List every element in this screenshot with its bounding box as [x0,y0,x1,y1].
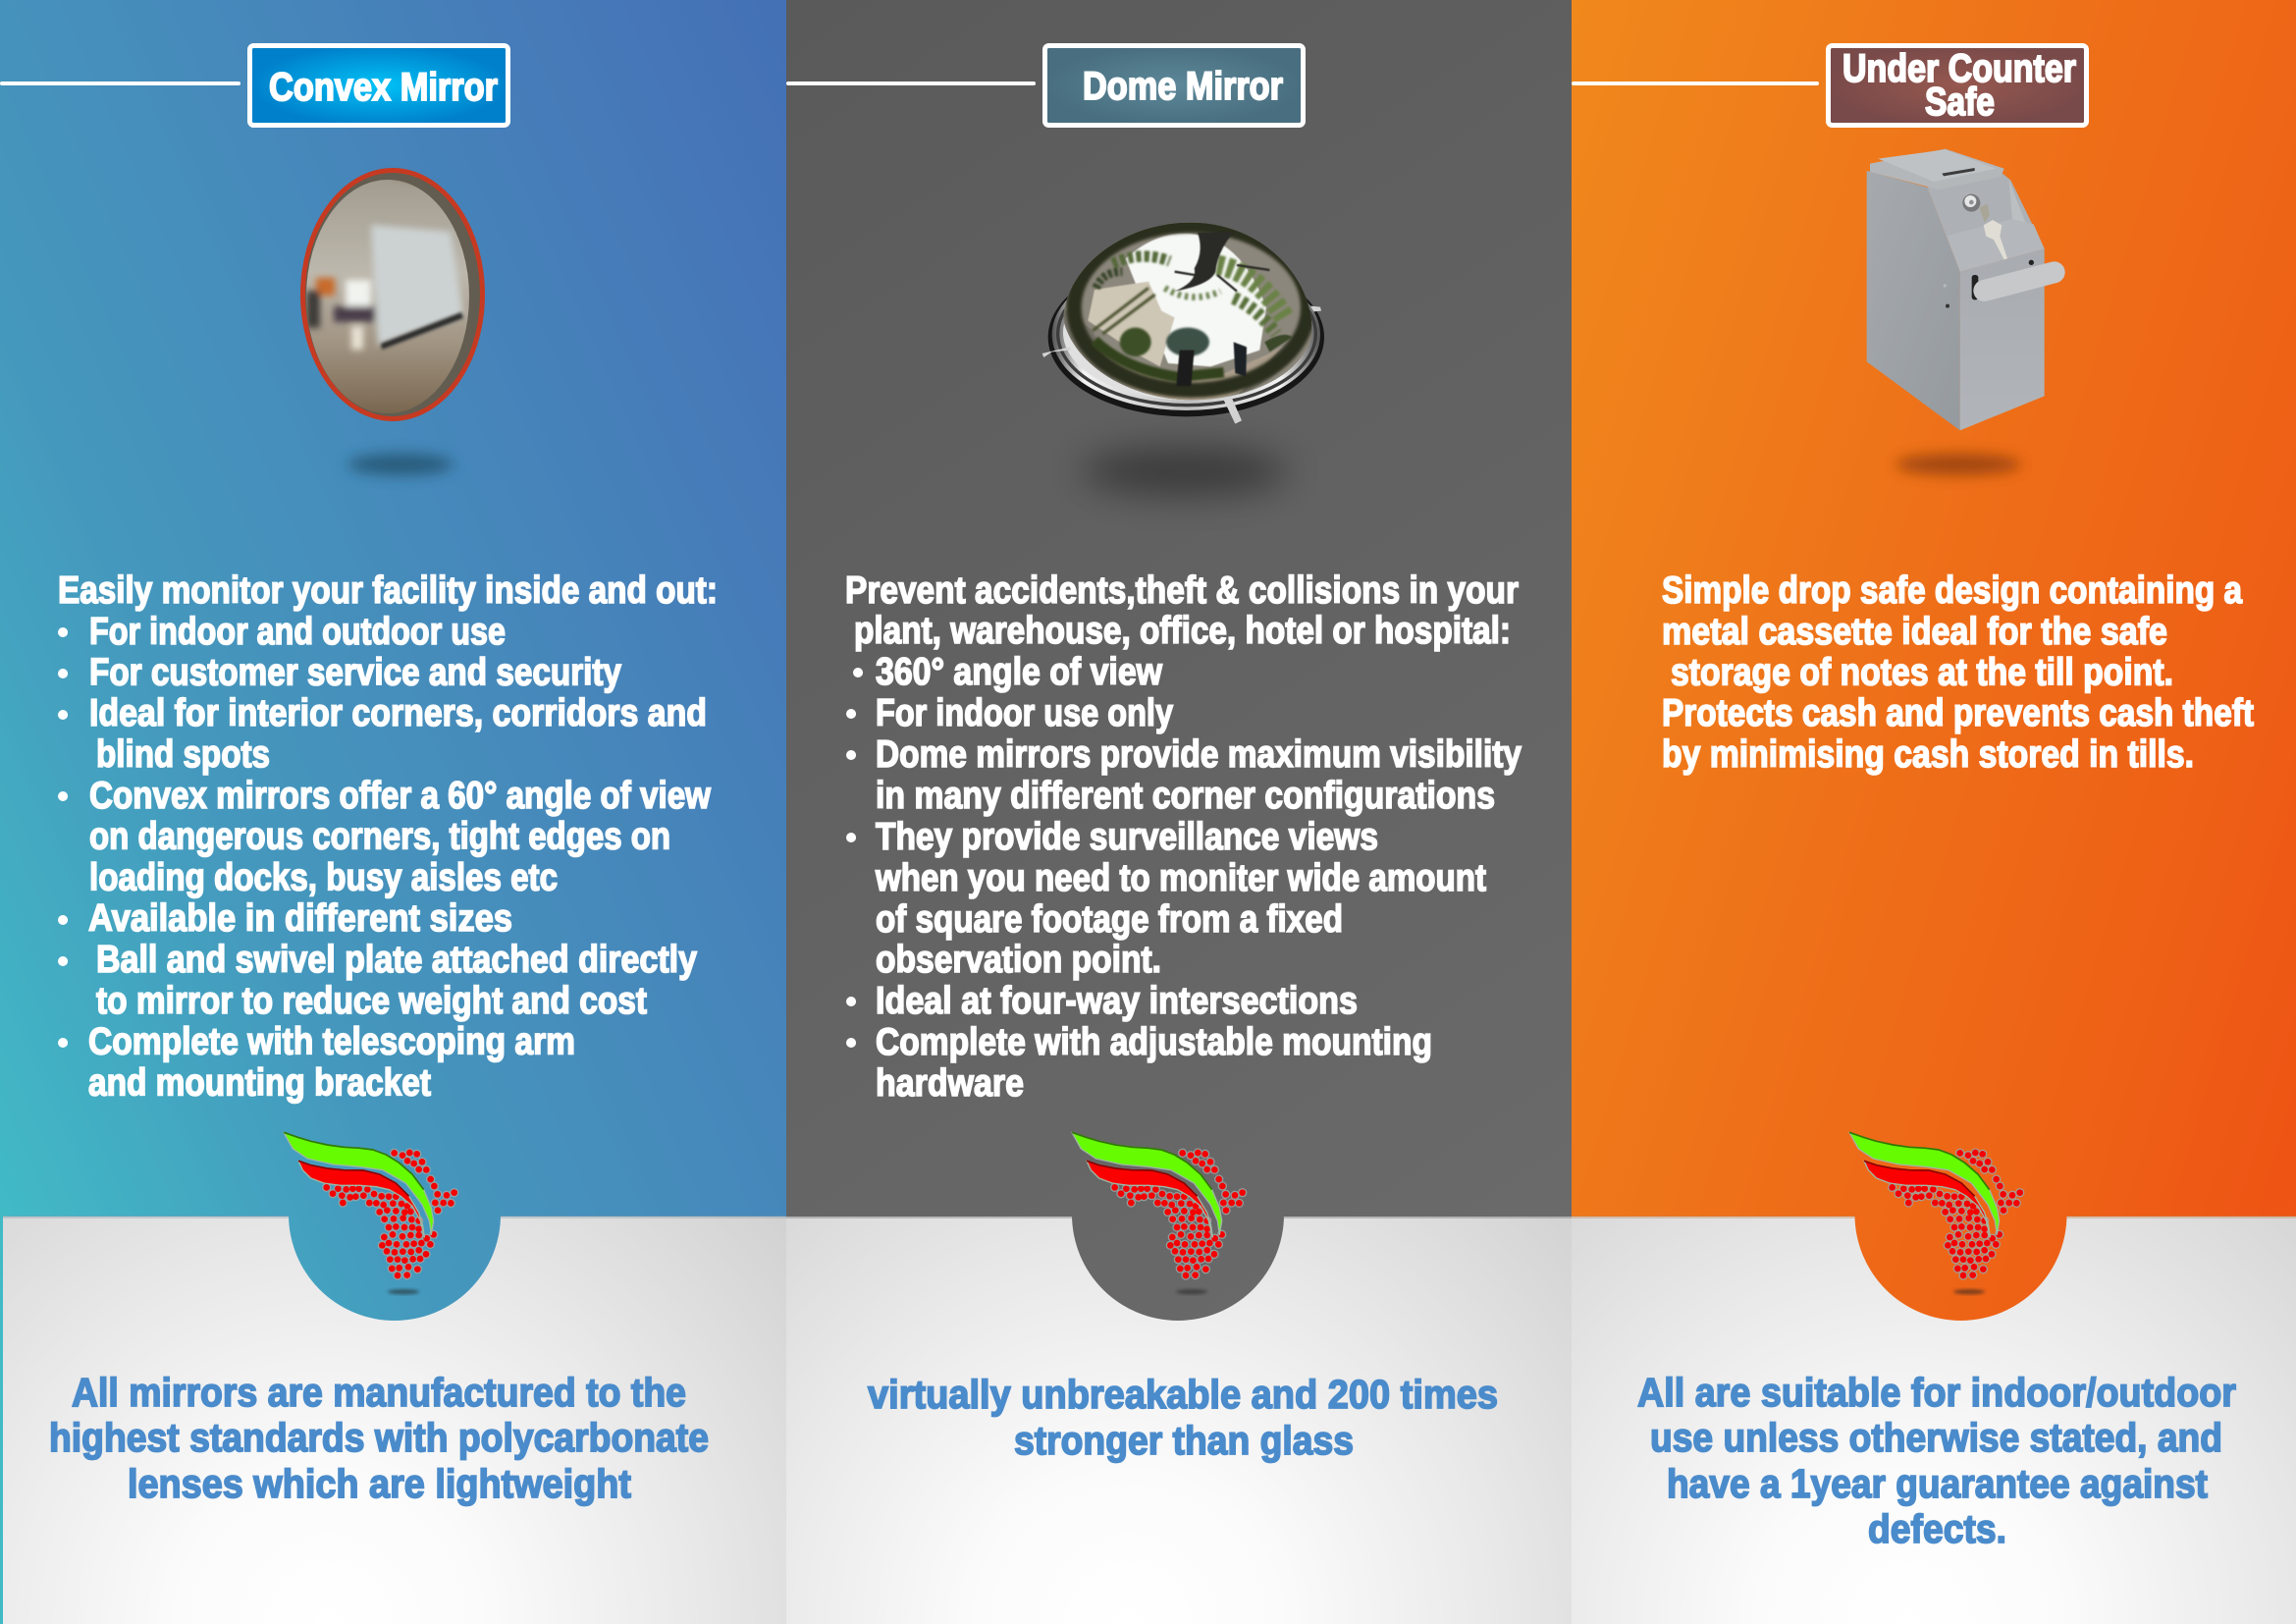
text block: convex mirror features: on dangerous corners, tight edges on [89,815,670,858]
text block: convex mirror features: Ideal for interior corners, corridors and [89,692,707,734]
text block: dome mirror features: Dome mirrors provide maximum visibility [876,733,1522,776]
text block: dome mirror features: hardware [876,1062,1024,1105]
heading connector line [1572,81,1819,85]
text block: safe description: storage of notes at the till point. [1671,652,2173,693]
shadow under convex mirror [347,454,454,475]
text block: convex mirror features: Available in different sizes [88,897,512,940]
text block: dome mirror features: Prevent accidents,theft & collisions in your [845,569,1519,612]
text block: dome mirror features: in many different corner configurations [876,775,1495,817]
panel: dome mirror [786,0,1572,1624]
lower panel background [786,1217,1572,1624]
text block: convex mirror features: Complete with telescoping arm [88,1021,575,1062]
icon: logo [1072,1132,1243,1294]
text block: dome mirror features: of square footage from a fixed [876,898,1343,941]
heading: Under Counter Safe: Under Counter [1842,47,2076,90]
text block: convex mirror features: Ball and swivel plate attached directly [96,939,697,981]
text block: convex mirror features: and mounting bracket [88,1062,431,1104]
text block: mirror standards [49,1370,709,1506]
text block: convex mirror features [58,569,718,1104]
text block: safe description: metal cassette ideal for the safe [1662,611,2167,653]
shadow under safe [1896,454,2021,475]
semicircle tab [1072,1109,1284,1321]
text block: convex mirror features: to mirror to reduce weight and cost [96,980,647,1022]
text block: convex mirror features: loading docks, busy aisles etc [89,856,558,899]
text block: dome mirror features: Complete with adjustable mounting [876,1021,1432,1063]
text block: dome mirror features: observation point. [876,939,1161,981]
semicircle tab [289,1109,501,1321]
icon: logo [284,1132,454,1294]
text block: safe description: by minimising cash stored in tills. [1662,733,2194,776]
text block: guarantee [1637,1370,2236,1551]
image: under counter safe [1867,149,2055,430]
lower panel background [3,1217,786,1624]
text block: dome strength: stronger than glass [1014,1418,1354,1463]
text block: mirror standards: highest standards with polycarbonate [49,1415,709,1460]
text block: dome strength: virtually unbreakable and 200 times [868,1372,1498,1417]
text block: convex mirror features: For indoor and outdoor use [89,611,506,653]
text block: dome mirror features: when you need to moniter wide amount [875,857,1486,899]
heading: Convex Mirror [249,45,508,126]
heading: Dome Mirror [1044,45,1304,126]
text block: convex mirror features: For customer service and security [89,652,621,693]
text block: guarantee: have a 1year guarantee against [1667,1461,2208,1506]
heading: Under Counter Safe: Safe [1925,81,1995,124]
shadow under dome mirror [1082,448,1288,495]
text block: convex mirror features: Easily monitor your facility inside and out: [58,569,718,612]
text block: safe description [1662,569,2254,776]
text block: guarantee: All are suitable for indoor/outdoor [1637,1370,2236,1415]
lower panel background [1572,1217,2296,1624]
heading connector line [786,81,1036,85]
text block: convex mirror features: Convex mirrors offer a 60° angle of view [89,775,712,817]
heading connector line [0,81,240,85]
heading: Under Counter Safe [1828,45,2087,126]
text block: dome mirror features: They provide surveillance views [876,816,1378,858]
panel background: grey [786,0,1572,1217]
text block: convex mirror features: blind spots [96,733,270,776]
text block: dome mirror features: Ideal at four-way intersections [876,980,1358,1022]
panel: under counter safe [1572,0,2296,1624]
text block: dome mirror features [845,569,1522,1105]
image: convex mirror [300,165,485,421]
panel background: orange gradient [1572,0,2296,1217]
text block: dome mirror features: For indoor use only [876,692,1173,734]
text block: mirror standards: All mirrors are manufactured to the [72,1370,686,1415]
heading: Dome Mirror: Dome Mirror [1083,65,1283,108]
semicircle tab [1855,1109,2067,1321]
heading: Convex Mirror: Convex Mirror [269,66,498,109]
panel background: blue gradient [0,0,786,1624]
text block: dome mirror features: 360° angle of view [876,651,1163,693]
image: dome mirror [1042,223,1324,424]
text block: mirror standards: lenses which are lightweight [128,1461,631,1506]
text block: dome mirror features: plant, warehouse, office, hotel or hospital: [854,610,1511,652]
text block: guarantee: defects. [1868,1506,2006,1551]
panel: convex mirror [0,0,786,1624]
icon: logo [1849,1132,2020,1294]
text block: dome strength [868,1372,1498,1463]
text block: guarantee: use unless otherwise stated, and [1650,1415,2222,1460]
